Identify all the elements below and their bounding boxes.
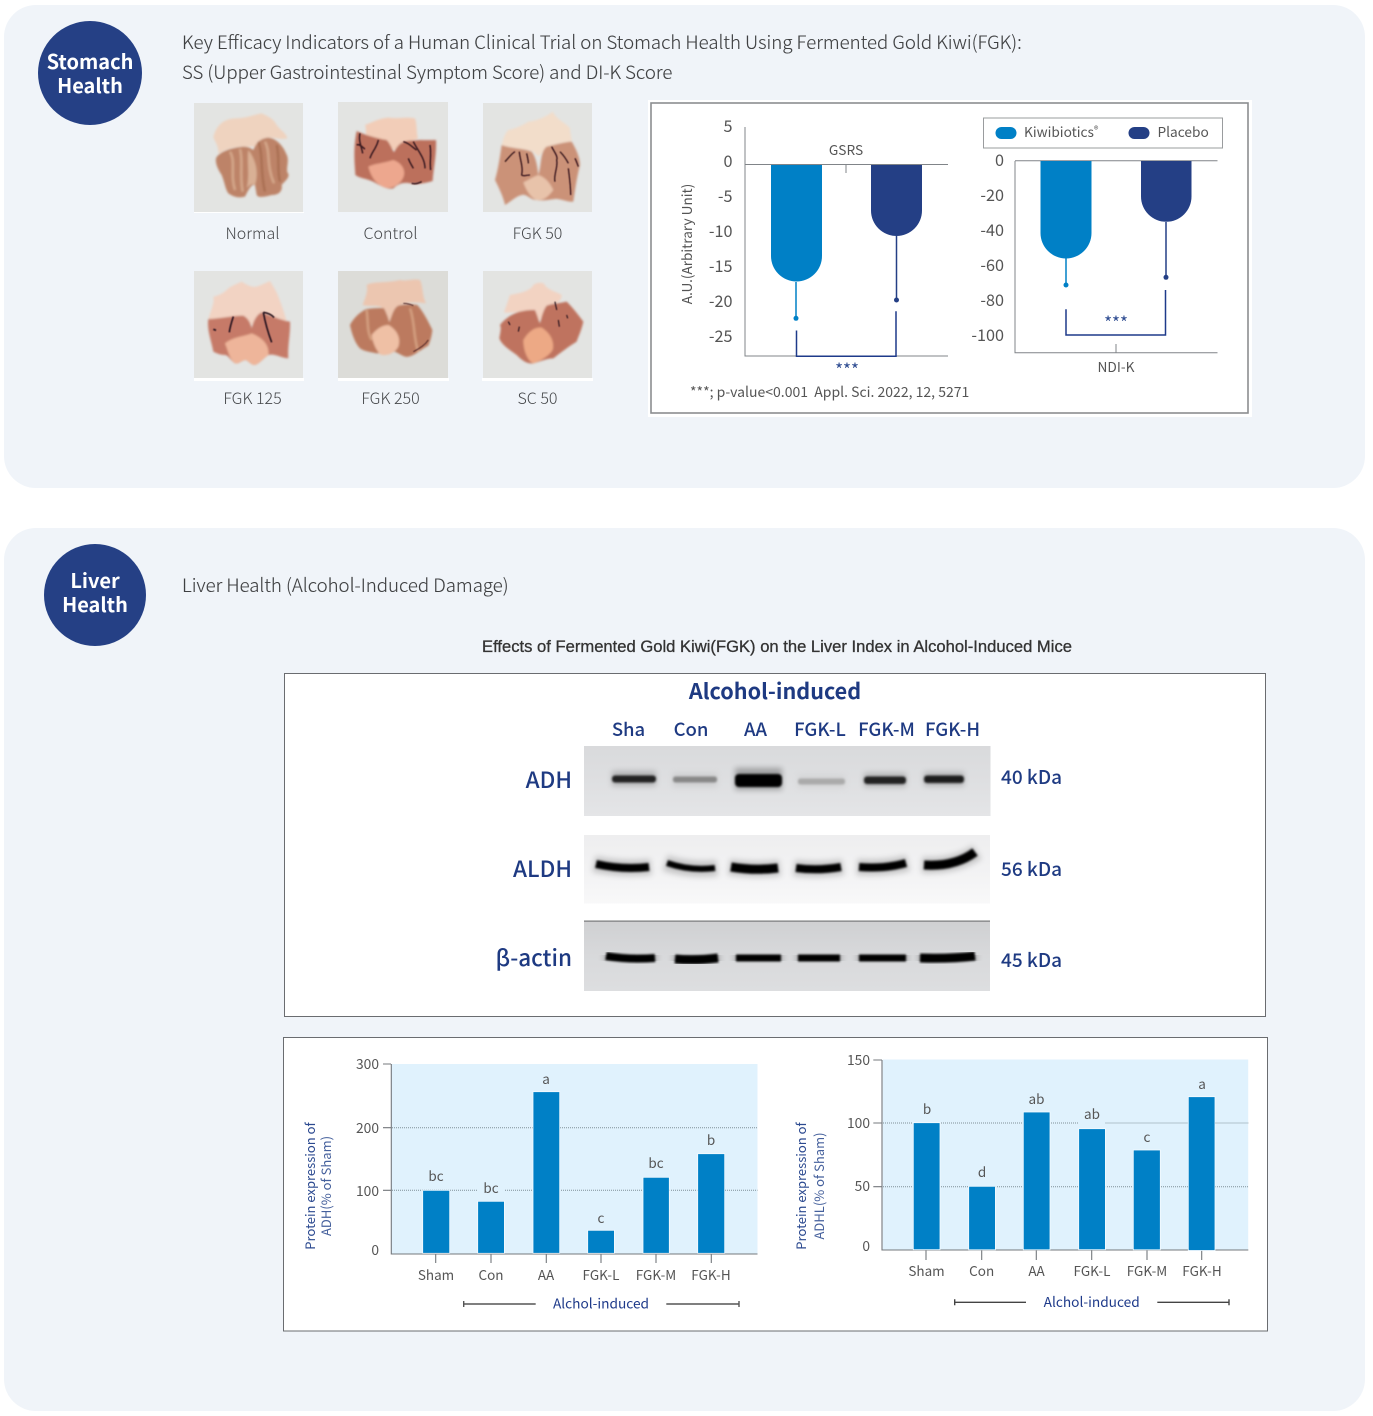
bar: Placebo GSRS xyxy=(871,165,922,302)
group labels xyxy=(418,1264,731,1284)
group labels: FGK-M xyxy=(636,1264,676,1284)
significance letters: a xyxy=(542,1068,550,1088)
chart: GSRS: -5 xyxy=(718,183,733,207)
heading: stomach trial title xyxy=(182,28,1022,85)
figure title: Effects of Fermented Gold Kiwi(FGK) on the Liver Index in Alcohol-Induced Mice xyxy=(482,637,1072,656)
photo grid: stomach tissue samples xyxy=(194,102,593,409)
chart: GSRS: *** xyxy=(835,356,859,381)
significance letters: c xyxy=(1144,1126,1151,1146)
blot: ALDH: 56 kDa xyxy=(1001,855,1062,882)
legend: Kiwibiotics xyxy=(1024,121,1094,141)
blot: beta-actin xyxy=(496,920,1062,991)
y axis title: Protein expression of xyxy=(300,1122,319,1250)
bar chart: ADH expression: 200 xyxy=(356,1117,379,1137)
bar chart: ADH expression: 0 xyxy=(371,1239,379,1259)
y axis title: ADH(% of Sham) xyxy=(316,1136,335,1236)
significance letters: bc xyxy=(648,1152,664,1172)
badge: Stomach Health: Stomach xyxy=(47,46,133,75)
significance letters: bc xyxy=(428,1165,444,1185)
bar: Placebo NDI-K xyxy=(1141,161,1192,280)
lane labels: Sha xyxy=(612,716,645,742)
blot: ALDH: ALDH xyxy=(513,852,572,884)
photo: SC 50 xyxy=(499,283,583,363)
chart: GSRS: 0 xyxy=(724,148,733,172)
chart: NDI-K: -60 xyxy=(980,252,1004,276)
bar: Kiwibiotics NDI-K xyxy=(1040,161,1092,288)
y axis title xyxy=(300,1122,335,1250)
lane labels: AA xyxy=(744,716,767,742)
significance bracket xyxy=(796,311,896,356)
chart: NDI-K: -40 xyxy=(980,217,1004,241)
chart: NDI-K: NDI-K xyxy=(1098,356,1135,376)
chart panel: GSRS and NDI-K scores xyxy=(648,100,1252,417)
chart: NDI-K: 0 xyxy=(995,147,1004,171)
group labels: FGK-L xyxy=(1074,1260,1110,1280)
lane labels: Con xyxy=(674,716,708,742)
photo: FGK 50 xyxy=(495,112,580,205)
chart: GSRS: GSRS xyxy=(829,139,863,159)
group labels: Sham xyxy=(418,1264,454,1284)
photo captions: Normal xyxy=(225,220,280,244)
range: Alchol-induced xyxy=(955,1291,1229,1311)
blot: beta-actin: β-actin xyxy=(496,941,572,973)
blot: ADH xyxy=(526,746,1062,816)
bars xyxy=(913,1097,1215,1250)
bar chart panel xyxy=(284,1038,1268,1331)
blot heading: Alcohol-induced xyxy=(688,675,861,706)
range: Alchol-induced: Alchol-induced xyxy=(1044,1291,1140,1311)
photo captions: FGK 250 xyxy=(361,385,420,409)
group labels: FGK-L xyxy=(583,1264,619,1284)
heading: stomach trial title: Key Efficacy Indicators of a Human Clinical Trial on Stomach Health Using Fermented Gold Kiwi(FGK): xyxy=(182,28,1022,55)
group labels: Con xyxy=(478,1264,504,1284)
group labels xyxy=(908,1260,1222,1280)
lane labels: FGK-H xyxy=(925,716,980,742)
photo captions xyxy=(223,220,562,409)
y axis title xyxy=(791,1122,828,1250)
bar chart: ADHL expression: 50 xyxy=(855,1175,870,1195)
chart: GSRS: -15 xyxy=(709,253,733,277)
bar chart: ADHL expression: 100 xyxy=(847,1112,870,1132)
group labels: AA xyxy=(1028,1260,1045,1280)
significance letters: d xyxy=(978,1161,986,1181)
group labels: FGK-M xyxy=(1127,1260,1167,1280)
significance letters: bc xyxy=(483,1177,499,1197)
range: Alchol-induced: Alchol-induced xyxy=(553,1292,649,1312)
legend: ® xyxy=(1094,122,1099,136)
photo captions: FGK 50 xyxy=(513,220,562,244)
lane labels xyxy=(612,716,980,742)
significance letters: ab xyxy=(1084,1103,1100,1123)
lane labels: FGK-L xyxy=(794,716,846,742)
panel: stomach health xyxy=(4,5,1365,488)
photo captions: FGK 125 xyxy=(223,385,282,409)
bar chart: ADHL expression: 150 xyxy=(847,1049,870,1069)
chart: GSRS xyxy=(676,113,948,381)
legend: Placebo xyxy=(1158,121,1209,141)
heading: liver health: Liver Health (Alcohol-Induced Damage) xyxy=(182,571,509,598)
significance letters: b xyxy=(707,1129,715,1149)
blot: ADH: 40 kDa xyxy=(1001,763,1062,790)
photo captions: SC 50 xyxy=(518,385,557,409)
chart: GSRS: -25 xyxy=(709,323,733,347)
significance letters xyxy=(428,1068,715,1227)
photo: Normal xyxy=(213,113,289,197)
significance letters: a xyxy=(1198,1073,1206,1093)
bar chart: ADH expression: 100 xyxy=(356,1180,379,1200)
significance letters: b xyxy=(923,1098,931,1118)
badge: Liver Health: Health xyxy=(62,589,128,618)
photo: FGK 125 xyxy=(208,281,290,365)
chart: NDI-K: -80 xyxy=(980,287,1004,311)
blot: beta-actin: 45 kDa xyxy=(1001,946,1062,973)
group labels: FGK-H xyxy=(1182,1260,1222,1280)
chart: NDI-K: -100 xyxy=(971,322,1004,346)
western blot panel xyxy=(284,674,1266,1016)
bar chart: ADHL expression: 0 xyxy=(862,1235,870,1255)
badge: Liver Health xyxy=(44,544,146,646)
legend xyxy=(984,118,1222,148)
lane labels: FGK-M xyxy=(858,716,915,742)
badge: Stomach Health xyxy=(38,21,142,125)
chart: NDI-K xyxy=(971,147,1218,376)
badge: Liver Health: Liver xyxy=(70,565,120,594)
bar chart: ADHL expression xyxy=(791,1049,1248,1311)
photo: FGK 250 xyxy=(350,280,432,357)
footnote: ***; p-value<0.001 Appl. Sci. 2022, 12, 5271 xyxy=(690,382,969,402)
chart: GSRS: -20 xyxy=(709,288,733,312)
significance letters: c xyxy=(598,1207,605,1227)
blot: ADH: ADH xyxy=(526,763,572,795)
badge: Stomach Health: Health xyxy=(57,70,123,99)
bar: Kiwibiotics GSRS xyxy=(771,165,822,321)
bar chart: ADH expression: 300 xyxy=(356,1053,379,1073)
y axis title: Protein expression of xyxy=(791,1122,810,1250)
chart: NDI-K: -20 xyxy=(980,182,1004,206)
blot: ALDH xyxy=(513,835,1062,904)
panel: liver health xyxy=(4,528,1365,1411)
group labels: FGK-H xyxy=(691,1264,731,1284)
group labels: Con xyxy=(969,1260,994,1280)
significance letters xyxy=(923,1073,1206,1181)
photo: Control xyxy=(354,118,436,189)
y axis title: A.U.(Arbitrary Unit) xyxy=(676,184,696,304)
group labels: AA xyxy=(538,1264,555,1284)
chart: GSRS: 5 xyxy=(724,113,733,137)
bars xyxy=(423,1092,725,1253)
y axis title: ADHL(% of Sham) xyxy=(809,1132,828,1240)
photo captions: Control xyxy=(364,220,417,244)
bar chart: ADH expression xyxy=(300,1053,758,1312)
heading: stomach trial title: SS (Upper Gastrointestinal Symptom Score) and DI-K Score xyxy=(182,58,672,85)
group labels: Sham xyxy=(908,1260,945,1280)
chart: NDI-K: *** xyxy=(1104,309,1128,334)
chart: GSRS: -10 xyxy=(709,218,733,242)
significance letters: ab xyxy=(1029,1088,1044,1108)
significance bracket xyxy=(1066,290,1166,335)
range: Alchol-induced xyxy=(464,1292,739,1312)
